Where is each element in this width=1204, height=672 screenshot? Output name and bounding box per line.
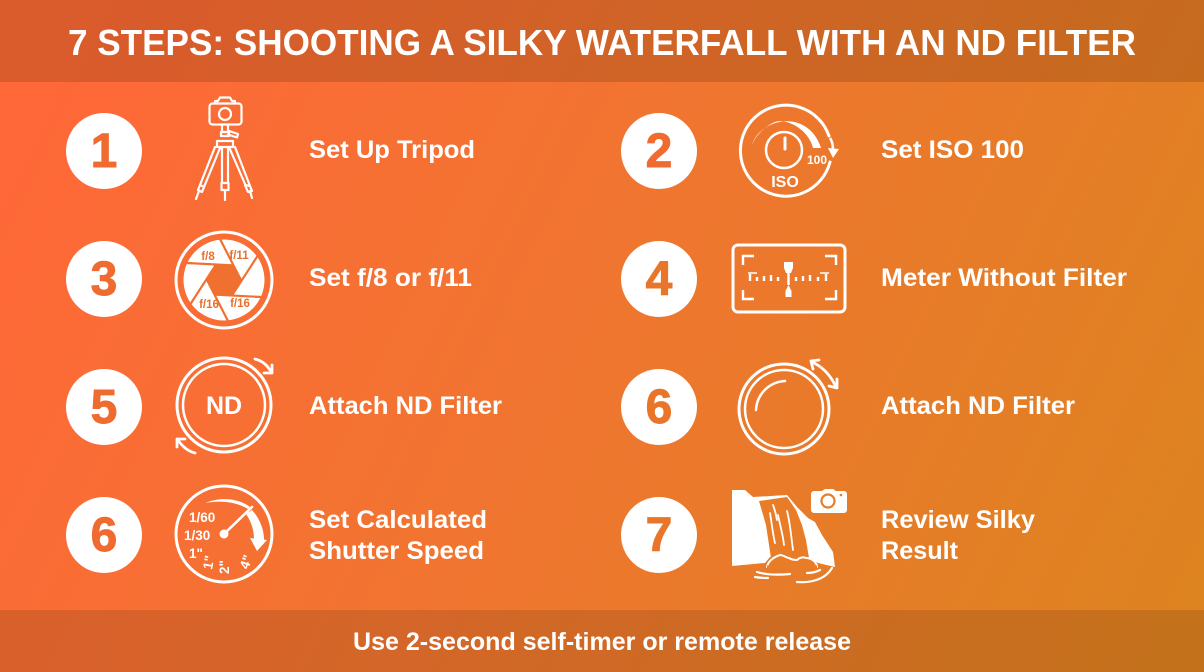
label: Set ISO 100 bbox=[881, 136, 1024, 164]
icon: aperture blades bbox=[176, 232, 272, 328]
number badge 1: 1 bbox=[91, 125, 117, 178]
icon: ISO dial: ISO bbox=[771, 174, 799, 191]
icon: camera on tripod bbox=[196, 98, 252, 200]
number badge 2 bbox=[621, 113, 697, 189]
header band bbox=[0, 0, 1204, 82]
number badge 6: 6 bbox=[646, 381, 672, 434]
icon: aperture blades: f/16 bbox=[230, 298, 250, 310]
label bbox=[881, 506, 1035, 565]
footer note: Use 2-second self-timer or remote release bbox=[353, 628, 851, 656]
number badge 3: 3 bbox=[91, 253, 117, 306]
number badge 5 bbox=[66, 369, 142, 445]
step 6: set calculated shutter speed bbox=[66, 486, 487, 582]
label: Shutter Speed bbox=[309, 537, 484, 565]
label: Set f/8 or f/11 bbox=[309, 264, 472, 292]
number badge 6: 6 bbox=[91, 509, 117, 562]
footer band bbox=[0, 610, 1204, 672]
icon: shutter speed gauge: 1/30 bbox=[184, 528, 210, 543]
step 2: set ISO 100 bbox=[621, 105, 1024, 196]
label bbox=[309, 506, 487, 565]
label: Review Silky bbox=[881, 506, 1035, 534]
number badge 4 bbox=[621, 241, 697, 317]
icon: shutter speed gauge: 1" bbox=[200, 554, 217, 571]
icon: waterfall and camera bbox=[732, 489, 847, 582]
icon: shutter speed gauge bbox=[176, 486, 272, 582]
number badge 4: 4 bbox=[646, 253, 673, 306]
number badge 1 bbox=[66, 113, 142, 189]
number badge 7: 7 bbox=[646, 509, 672, 562]
icon: shutter speed gauge: 4" bbox=[237, 553, 256, 571]
icon: filter ring with rotate arrow bbox=[739, 360, 837, 454]
step 4: meter without filter bbox=[621, 241, 1127, 317]
step 6: attach ND filter bbox=[621, 360, 1075, 454]
icon: shutter speed gauge: 1/60 bbox=[189, 510, 215, 525]
step 1: set up tripod bbox=[66, 98, 475, 200]
number badge 3 bbox=[66, 241, 142, 317]
number badge 2: 2 bbox=[646, 125, 672, 178]
label: Attach ND Filter bbox=[881, 392, 1075, 420]
step 3: set aperture bbox=[66, 232, 472, 328]
icon: ND filter ring bbox=[177, 358, 272, 453]
icon: ISO dial bbox=[740, 105, 839, 196]
icon: aperture blades: f/8 bbox=[201, 251, 215, 263]
icon: shutter speed gauge: 1" bbox=[189, 546, 203, 561]
icon: ISO dial: 100 bbox=[807, 153, 827, 167]
label: Attach ND Filter bbox=[309, 392, 502, 420]
step 5: attach ND filter bbox=[66, 358, 502, 453]
icon: shutter speed gauge: 2" bbox=[217, 560, 232, 574]
label: Result bbox=[881, 537, 959, 565]
icon: viewfinder meter bbox=[733, 245, 845, 312]
label: Set Calculated bbox=[309, 506, 487, 534]
number badge 6 bbox=[621, 369, 697, 445]
number badge 6 bbox=[66, 497, 142, 573]
number badge 7 bbox=[621, 497, 697, 573]
title: 7 STEPS: SHOOTING A SILKY WATERFALL WITH AN ND FILTER bbox=[68, 22, 1136, 63]
icon: aperture blades: f/11 bbox=[229, 250, 249, 262]
icon: aperture blades: f/16 bbox=[199, 299, 219, 311]
step 7: review silky result bbox=[621, 489, 1035, 582]
label: Meter Without Filter bbox=[881, 264, 1127, 292]
number badge 5: 5 bbox=[91, 381, 117, 434]
icon: ND filter ring: ND bbox=[206, 392, 242, 420]
label: Set Up Tripod bbox=[309, 136, 475, 164]
